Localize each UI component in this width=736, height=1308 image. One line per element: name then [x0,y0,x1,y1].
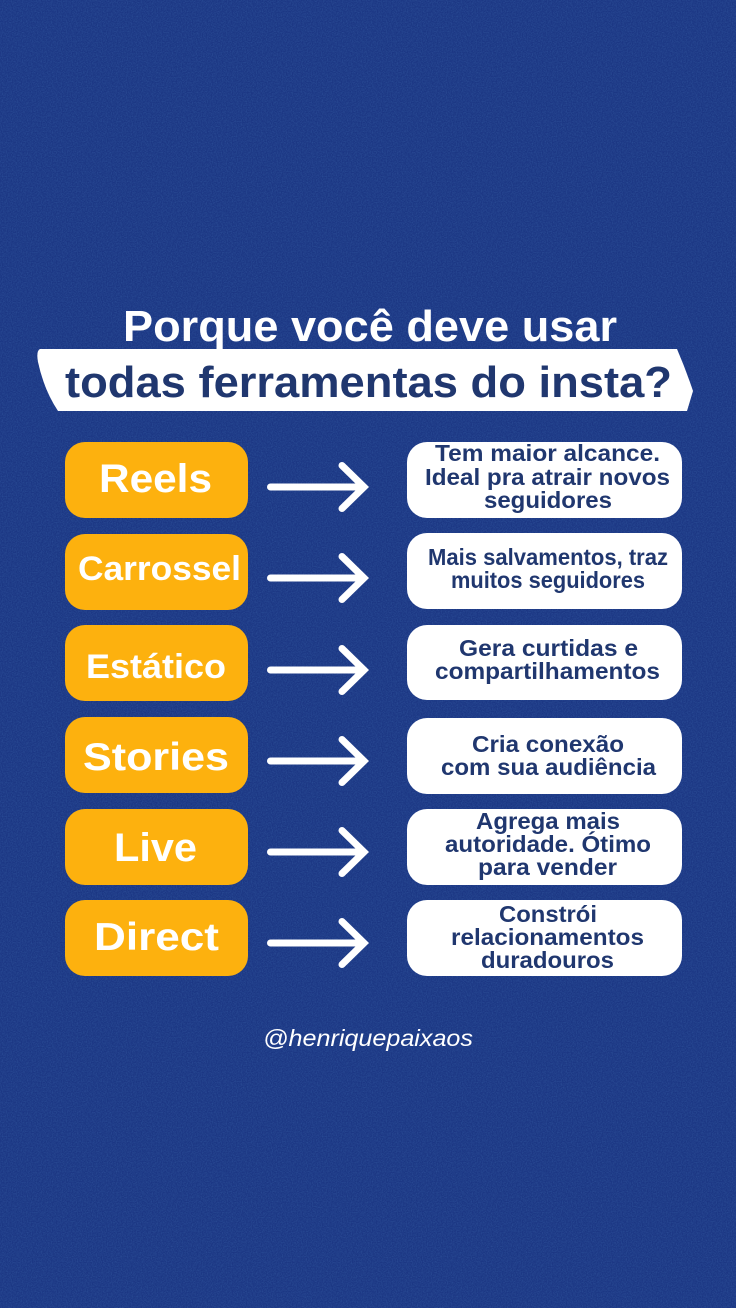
title [37,302,693,411]
panel: Reels row [65,440,682,518]
description: Carrossel: Mais salvamentos, traz [428,544,668,570]
arrow [270,466,364,508]
panel: Carrossel row [65,533,682,610]
arrow [270,556,364,600]
description: Direct: duradouros [481,947,614,973]
description: Live: autoridade. Ótimo [445,830,651,857]
tool label: Carrossel: Carrossel [78,550,241,588]
description: Stories: Cria conexão [472,731,624,757]
description: Live: Agrega mais [476,808,620,834]
tool label: Estático: Estático [86,648,226,686]
description: Estático: Gera curtidas e [459,635,638,661]
tool label: Stories [65,717,248,793]
description: Estático [407,625,682,700]
tool label: Estático [65,625,248,701]
tool label: Live: Live [114,826,197,870]
tool label: Direct: Direct [94,916,219,959]
description: Direct [407,900,682,976]
tool label: Stories: Stories [83,736,229,779]
panel: Direct row [65,900,682,976]
description: Direct: relacionamentos [451,924,644,950]
panel: Live row [65,808,682,885]
arrow [270,922,364,964]
tool label: Live [65,809,248,885]
author handle: @henriquepaixaos [263,1025,474,1051]
title banner: todas ferramentas do insta? [65,358,672,407]
description: Live: para vender [478,854,617,880]
panel: Stories row [65,717,682,794]
arrow [270,648,364,692]
arrow [270,830,364,874]
tool label: Carrossel [65,534,248,610]
description: Reels [407,440,682,518]
description: Direct: Constrói [499,901,597,927]
description: Carrossel: muitos seguidores [451,567,645,593]
tool label: Reels: Reels [99,457,212,501]
arrow [270,740,364,782]
description: Reels: Tem maior alcance. [435,440,660,466]
tool label: Direct [65,900,248,976]
description: Stories: com sua audiência [441,754,656,780]
title line 1: Porque você deve usar [123,302,617,351]
description: Carrossel [407,533,682,609]
description: Stories [407,718,682,794]
description: Reels: Ideal pra atrair novos [425,464,670,490]
description: Live [407,808,682,885]
tool label: Reels [65,442,248,518]
description: Estático: compartilhamentos [435,658,660,684]
panel: Estático row [65,625,682,701]
description: Reels: seguidores [484,487,612,513]
